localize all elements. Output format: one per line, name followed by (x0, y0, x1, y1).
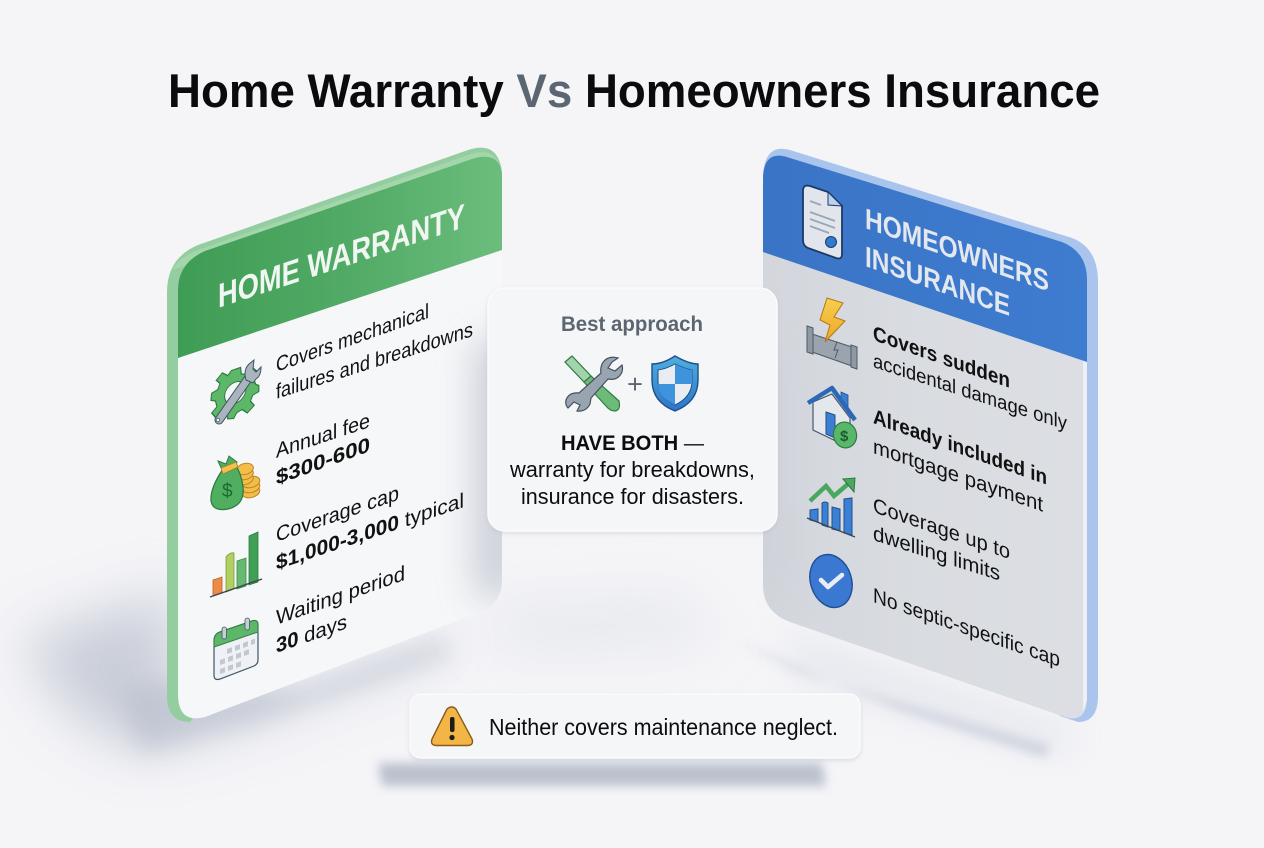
card body (763, 240, 1087, 718)
panel: home warranty (167, 148, 520, 722)
panel: best approach (488, 288, 777, 531)
warning text: Neither covers maintenance neglect. (489, 714, 838, 740)
item: waiting period (276, 560, 405, 658)
text: have both: insurance for disasters. (521, 484, 744, 509)
item: coverage up to: dwelling limits (873, 521, 1000, 586)
panel: homeowners insurance (755, 149, 1098, 722)
icon: bar chart (210, 532, 262, 597)
icon: house with coin (808, 388, 859, 451)
icon: policy document (803, 186, 842, 258)
item: already included: mortgage payment (873, 434, 1043, 517)
header band (178, 157, 502, 358)
icon: money bag with coins: $ (222, 481, 233, 502)
item: annual fee: Annual fee (276, 408, 370, 463)
text: have both: HAVE BOTH — (561, 432, 704, 455)
icon: money bag with coins (211, 456, 261, 510)
icon: warning triangle (432, 707, 472, 746)
item: coverage up to: Coverage up to (873, 493, 1010, 564)
item: covers mechanical: failures and breakdowns (276, 317, 473, 404)
item: waiting period: Waiting period (276, 560, 405, 630)
label: best approach: Best approach (561, 313, 703, 336)
icon: house with coin: $ (840, 428, 849, 445)
icon: shield (652, 356, 698, 411)
item: covers mechanical: Covers mechanical (276, 298, 429, 377)
icon: cracked pipe with lightning (807, 298, 857, 369)
heading: homeowners insurance: INSURANCE (865, 241, 1010, 323)
item: coverage cap: $1,000-3,000 typical (276, 488, 464, 575)
item: covers sudden: Covers sudden (873, 321, 1010, 393)
header band (763, 156, 1087, 362)
plus sign: + (627, 369, 643, 399)
icon: check circle (803, 549, 859, 613)
item: coverage cap: Coverage cap (276, 480, 399, 547)
icon: crossed tools (565, 356, 622, 411)
heading: homeowners insurance: HOMEOWNERS (865, 203, 1049, 298)
item: covers sudden (873, 321, 1068, 435)
callout: neither covers maintenance (410, 694, 860, 758)
icon: calendar (214, 618, 258, 680)
item: covers sudden: accidental damage only (873, 349, 1068, 435)
item: already included: Already included in (873, 404, 1047, 490)
card body (178, 240, 502, 718)
text: have both: warranty for breakdowns, (509, 457, 755, 482)
item: annual fee (276, 408, 370, 490)
item: no septic cap: No septic-specific cap (873, 583, 1060, 672)
item: waiting period: 30 days (276, 609, 347, 658)
icon: rising chart (807, 478, 855, 537)
title: Home Warranty Vs Homeowners Insurance (168, 64, 1100, 117)
icon: gear and wrench (211, 360, 261, 426)
text: have both (509, 432, 755, 509)
heading: home warranty: HOME WARRANTY (218, 197, 465, 316)
item: annual fee: $300-600 (276, 432, 370, 490)
